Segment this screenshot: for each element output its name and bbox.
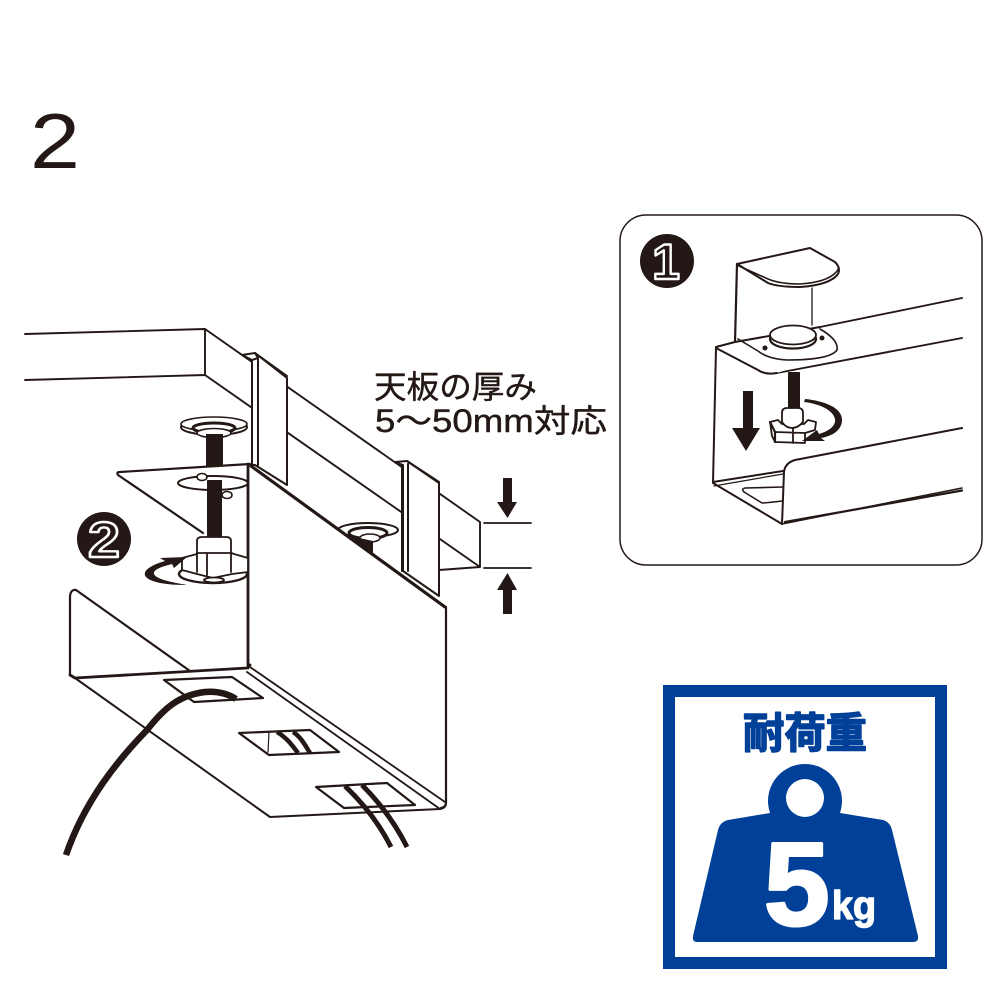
- down arrow: [732, 391, 760, 451]
- thickness dimension arrows: [484, 478, 531, 614]
- lower tray: [70, 590, 446, 817]
- plate screw dots: [762, 336, 824, 350]
- badge: load capacity 5kg: [669, 691, 941, 963]
- weight icon: [693, 764, 918, 942]
- badge number 2: 2: [88, 512, 120, 568]
- badge number 1: 1: [652, 234, 680, 290]
- clamp bracket left: [242, 353, 287, 485]
- lower bolt: [207, 480, 222, 538]
- plate disc: [178, 474, 248, 498]
- tray rails: [777, 298, 962, 373]
- panel: step 1 inset: [620, 215, 982, 565]
- clamp plate: [716, 328, 838, 374]
- cables 2: [277, 732, 310, 753]
- badge frame: [669, 691, 941, 963]
- thickness label: 5～50mm対応: [375, 403, 607, 439]
- slot 1: [164, 677, 263, 702]
- kg unit: kg: [832, 884, 876, 928]
- badge number 1: [640, 234, 694, 290]
- rotation arrow left: [145, 557, 187, 585]
- thickness label: 天板の厚み: [374, 369, 537, 405]
- slot 2: [239, 730, 339, 755]
- wing nut: [179, 537, 248, 583]
- step number 2: 2: [30, 97, 80, 185]
- cables 3: [345, 785, 407, 847]
- clamp bracket right: [395, 461, 439, 596]
- cable 1: [66, 692, 236, 855]
- slot 3: [316, 783, 415, 808]
- bolt: [788, 372, 800, 408]
- clamp pad: [735, 248, 839, 342]
- 5 value: 5: [764, 819, 830, 951]
- top plate: [117, 464, 250, 600]
- puck: [770, 326, 816, 348]
- tray body: [713, 348, 962, 524]
- badge number 2: [77, 512, 131, 568]
- bracket front face: [247, 464, 445, 809]
- main illustration: clamp under desk: [25, 329, 480, 855]
- thickness label: [374, 369, 607, 439]
- badge heading: 耐荷重: [743, 710, 867, 757]
- second washer: [338, 523, 398, 556]
- wing nut: [770, 408, 816, 443]
- desk board: [25, 329, 480, 570]
- rotation arrow: [802, 399, 842, 441]
- upper washer and bolt: [181, 417, 247, 466]
